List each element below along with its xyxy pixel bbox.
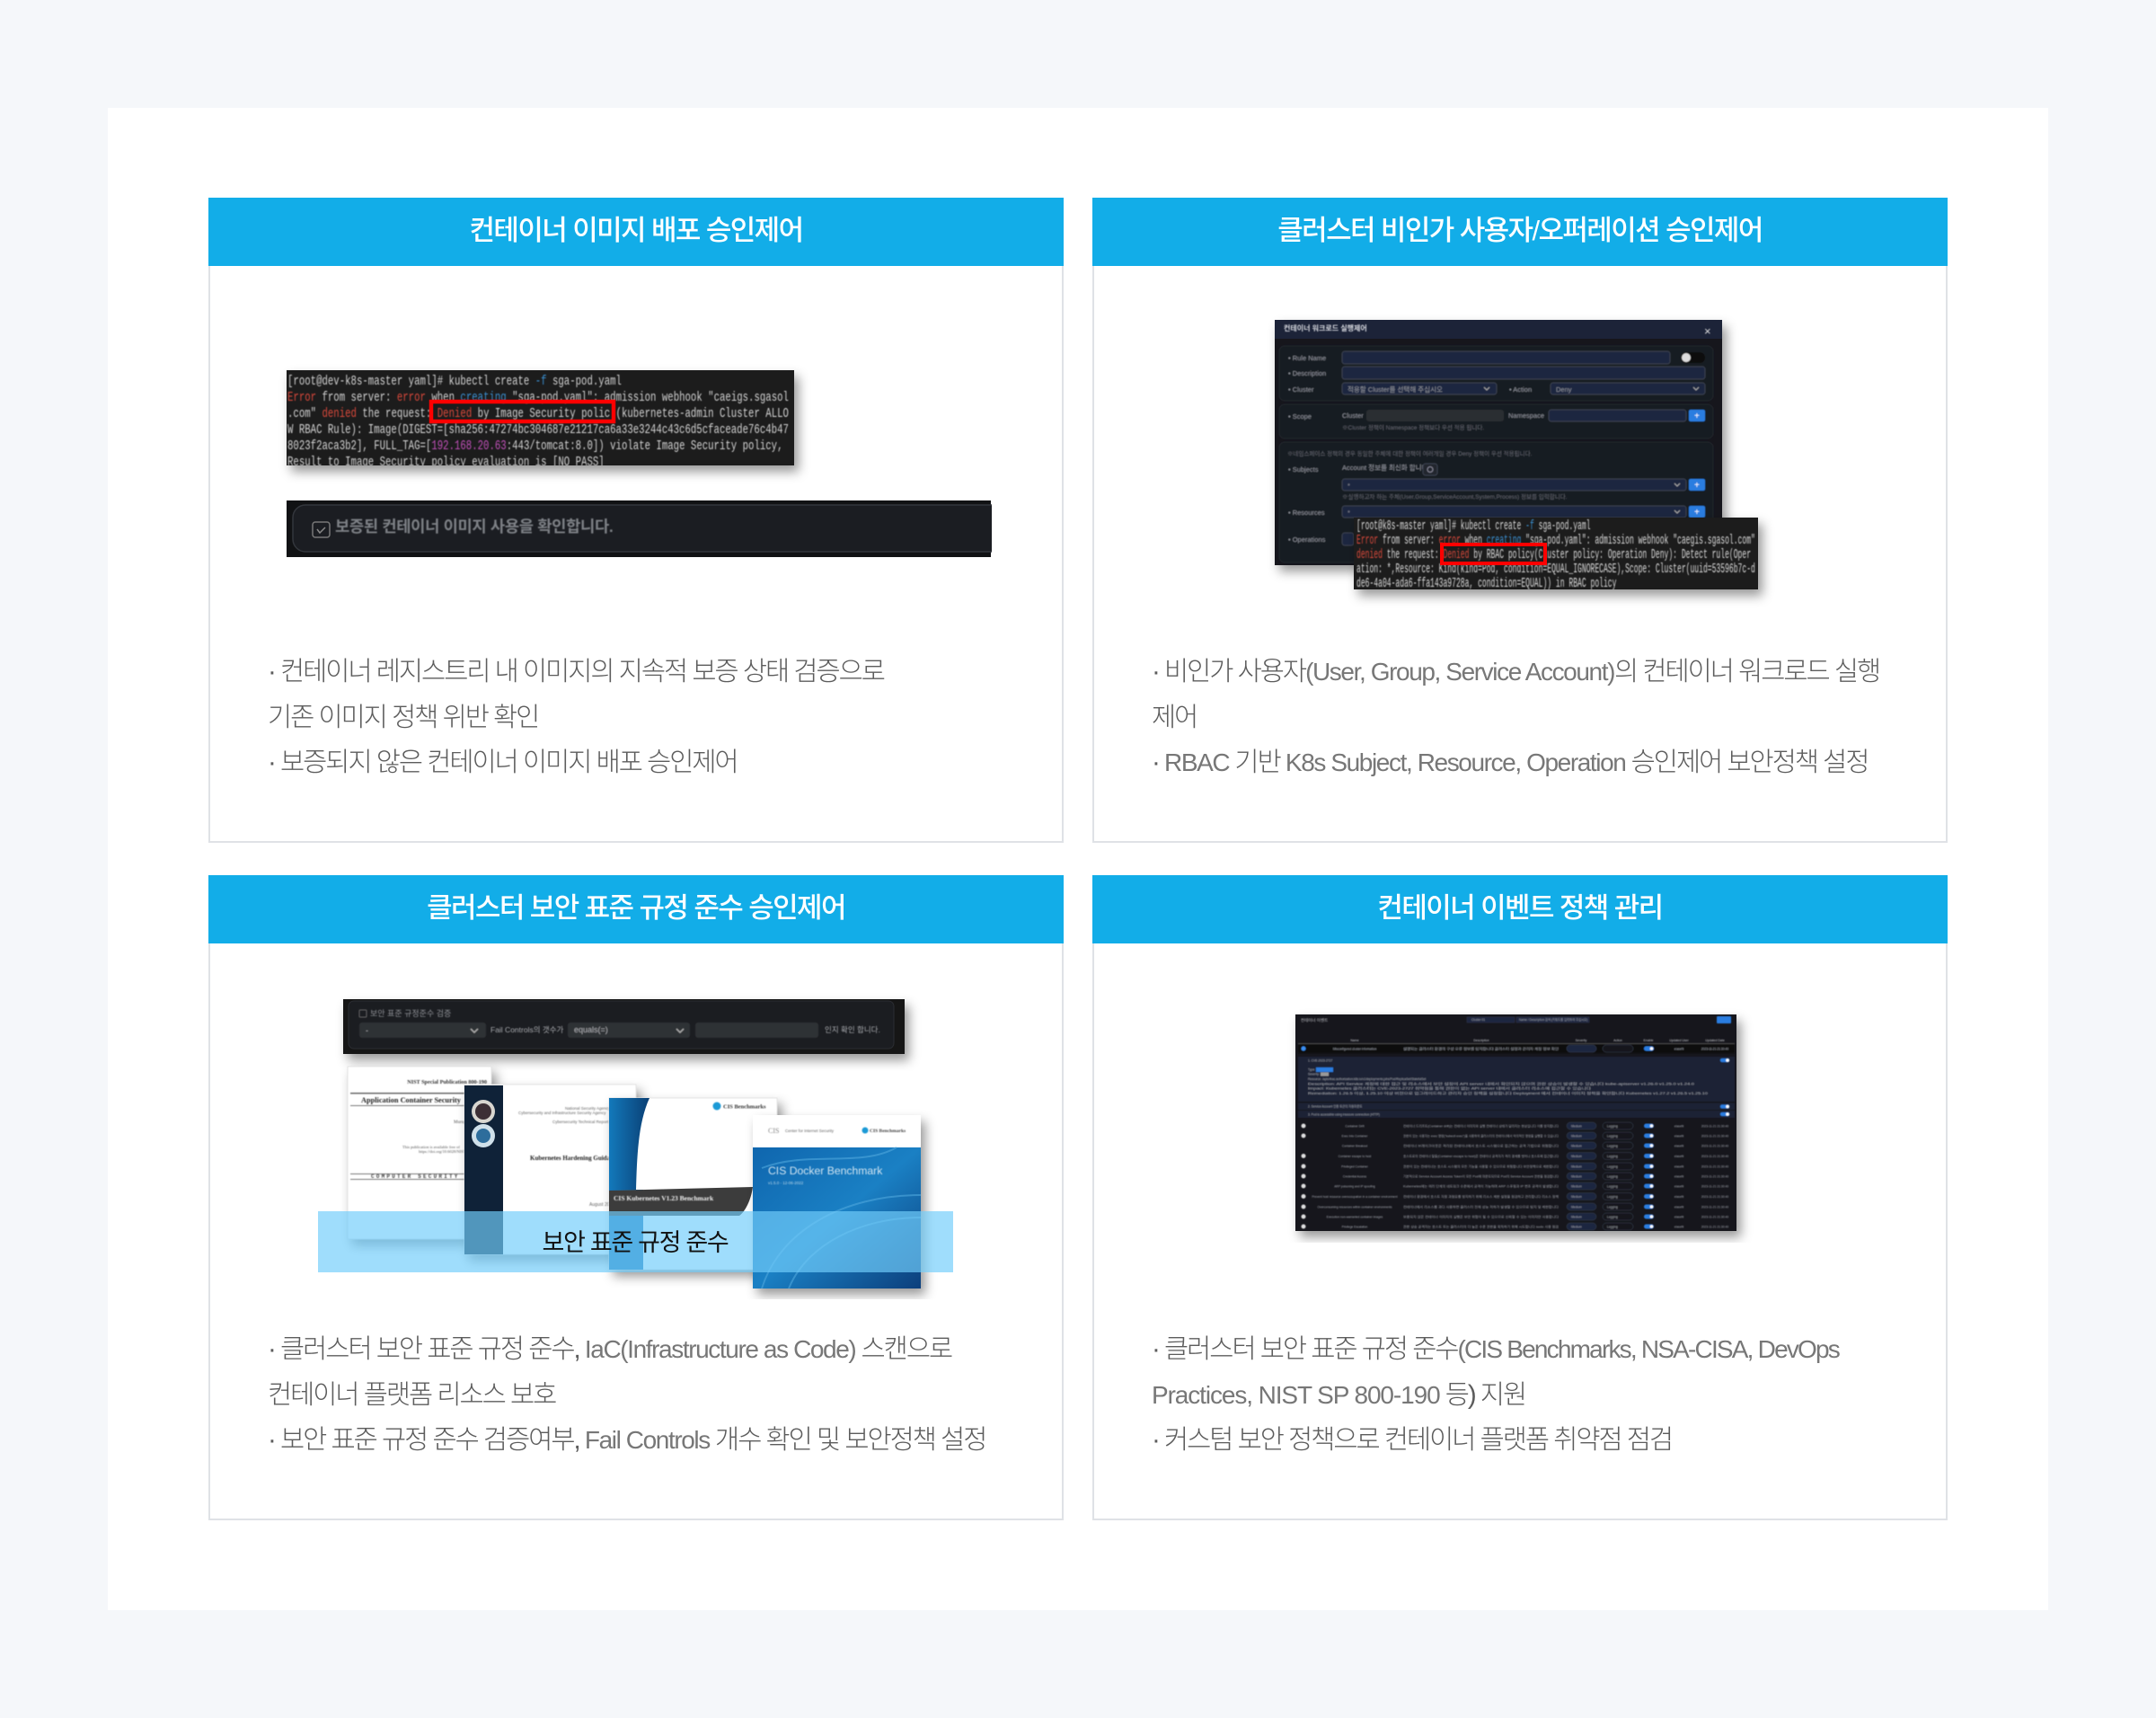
compliance check bar: 보안 표준 규정준수 검증	[370, 1008, 451, 1018]
workload control modal: ※Cluster 정책이 Namespace 정책보다 우선 적용 됩니다.	[1342, 423, 1484, 431]
event policy rows: 기본적으로 Service Account Access Token이 모든 Pod에 마운트되므로 Pod의 Service Account 권한을 점검합니다	[1403, 1173, 1559, 1179]
workload control modal: *	[1348, 482, 1350, 490]
event policy rows: Medium	[1571, 1184, 1582, 1188]
workload control modal: ※네임스페이스 정책의 경우 동일한 주체에 대한 정책이 여러개일 경우 Deny 정책이 우선 적용됩니다.	[1287, 449, 1533, 457]
event policy rows: 권한이 있는 사용자는 exec 명령("kubectl exec")을 사용하여 클러스터의 컨테이너에서 악의적인 명령을 실행할 수 있습니다	[1403, 1134, 1559, 1138]
event policy rows: Logging	[1607, 1175, 1618, 1179]
description text: · 커스텀 보안 정책으로 컨테이너 플랫폼 취약점 점검	[1152, 1425, 1672, 1455]
white card background	[108, 108, 2048, 1610]
heading: unauthorized user and operation	[1092, 198, 1948, 266]
image: container event policy table screenshot: Description	[1473, 1039, 1489, 1042]
workload control modal: 적용할 Cluster를 선택해 주십시오	[1348, 385, 1443, 394]
description text	[268, 657, 884, 777]
document: Kubernetes Hardening Guidance: Kubernetes Hardening Guidance	[530, 1155, 619, 1162]
event policy rows: elasefit	[1674, 1175, 1683, 1179]
description text	[1152, 657, 1879, 777]
terminal screenshot: W RBAC Rule): Image(DIGEST=[sha256:47274bc304687e21217ca6a33e3244c43c6d5cfaceade76c4b47	[287, 421, 789, 438]
document: CIS Kubernetes Benchmark	[609, 1098, 777, 1270]
event policy rows: Logging	[1607, 1165, 1618, 1168]
event policy rows: 2023-11-21 21:30:40	[1701, 1226, 1728, 1229]
workload control modal: 컨테이너 워크로드 실행제어	[1284, 323, 1367, 332]
compliance check bar: 인지 확인 합니다.	[825, 1025, 880, 1034]
event policy rows: 2023-11-21 21:30:40	[1701, 1145, 1728, 1148]
caption band: security standard compliance	[318, 1211, 953, 1272]
event policy rows: elasefit	[1674, 1184, 1683, 1188]
event policy rows: Privileged Container	[1341, 1165, 1369, 1168]
image: compliance bar and benchmark documents	[318, 998, 953, 1299]
description text: · 비인가 사용자(User, Group, Service Account)의 컨테이너 워크로드 실행	[1152, 657, 1879, 686]
description text: · RBAC 기반 K8s Subject, Resource, Operation 승인제어 보안정책 설정	[1152, 748, 1868, 777]
terminal screenshot: Error from server: error when creating "sga-pod.yaml": admission webhook "caeigs.sgasol	[287, 389, 789, 405]
document: CIS Docker Benchmark: CIS	[768, 1127, 779, 1135]
event policy rows: Logging	[1607, 1215, 1618, 1218]
terminal screenshot: Result to Image Security policy evaluation is [NO PASS]	[287, 454, 605, 470]
image: container event policy table screenshot: Misconfigured cluster information	[1333, 1048, 1376, 1051]
document: Kubernetes Hardening Guidance: Cybersecurity and Infrastructure Security Agency	[518, 1111, 606, 1115]
document: CIS Kubernetes Benchmark: CIS Benchmarks	[723, 1103, 766, 1111]
caption band: security standard compliance: 보안 표준 규정 준수	[543, 1229, 729, 1256]
event policy rows: Privilege Escalation	[1342, 1226, 1368, 1229]
event policy rows: Logging	[1607, 1206, 1618, 1209]
image: container event policy table screenshot: Severity:	[1308, 1073, 1320, 1076]
heading: security standard compliance	[208, 875, 1064, 943]
workload control modal: ×	[1704, 324, 1711, 338]
description text: · 보안 표준 규정 준수 검증여부, Fail Controls 개수 확인 및 보안정책 설정	[268, 1425, 985, 1455]
image: container event policy table screenshot: Name / Description 검색 (키워드를 입력하여 주십시오)	[1519, 1017, 1587, 1022]
image: container event policy table screenshot: 1. CVE-2023-2727	[1308, 1058, 1332, 1062]
document: CIS Docker Benchmark: CIS Docker Benchmark	[768, 1165, 883, 1177]
document: CIS Docker Benchmark: CIS Benchmarks	[870, 1129, 906, 1134]
event policy rows: Medium	[1571, 1145, 1582, 1148]
document: NIST SP 800-190	[348, 1067, 491, 1239]
panel: unauthorized user and operation admission control	[1092, 198, 1948, 843]
terminal overlay	[1354, 518, 1758, 591]
event policy rows: Medium	[1571, 1175, 1582, 1179]
panel: cluster security standard compliance admission control	[208, 875, 1064, 1520]
workload control modal: • Rule Name	[1288, 354, 1326, 362]
compliance check bar: Fail Controls의 갯수가	[490, 1025, 564, 1034]
event policy rows: 2023-11-21 21:30:40	[1701, 1215, 1728, 1218]
terminal overlay: Error from server: error when creating "sga-pod.yaml": admission webhook "caegis.sgasol.com"	[1356, 533, 1755, 548]
image: container event policy table screenshot: elasefit	[1674, 1048, 1683, 1051]
workload control modal: • Cluster	[1288, 385, 1314, 394]
description text: · 보증되지 않은 컨테이너 이미지 배포 승인제어	[268, 748, 738, 777]
event policy rows: 컨테이너 드리프트(Container drift)는 컨테이너 이미지와 실행 컨테이너 상태가 달라지는 현상입니다 이를 방지합니다	[1403, 1123, 1559, 1129]
event policy rows: elasefit	[1674, 1215, 1683, 1218]
document: NIST SP 800-190: Application Container Security	[361, 1096, 462, 1104]
compliance check bar: -	[366, 1026, 368, 1035]
event policy rows: elasefit	[1674, 1134, 1683, 1138]
panel: container event policy management	[1092, 875, 1948, 1520]
image: container event policy table screenshot: Description: API Service 계정에 대한 접근 및 리소스에서 보안 설정이 API server 내에서 확인되지 않으며 권한 상승이 발생할 수 있습니다 kube-apiserver v1.26.0 v1.25.0 v1.24.0	[1308, 1082, 1694, 1085]
workload control modal: Deny	[1556, 385, 1572, 394]
event policy rows: elasefit	[1674, 1165, 1683, 1168]
event policy rows: 보증되지 않은 컨테이너 이미지의 실행은 보안 위협이 될 수 있으므로 신뢰할 수 있는 이미지만 사용합니다	[1403, 1215, 1559, 1218]
event policy rows: 2023-11-21 21:30:40	[1701, 1175, 1728, 1179]
image: container event policy table screenshot: 2. Service Account 인증 토큰의 자동마운트	[1308, 1103, 1362, 1109]
terminal overlay: ation: *,Resource: Kind(kind=Pod, condition=EQUAL_IGNORECASE),Scope: Cluster(uuid=53596b7c-d	[1356, 562, 1755, 577]
event policy rows: Medium	[1571, 1206, 1582, 1209]
image: container event policy table screenshot: Name	[1350, 1039, 1359, 1042]
event policy rows: Kubernetes에는 여러 단계의 네트워크 수준에서 공격이 가능하며 ARP 스푸핑과 IP 변조 공격이 발생합니다	[1403, 1184, 1559, 1188]
event policy rows: 2023-11-21 21:30:40	[1701, 1195, 1728, 1199]
event policy rows: 컨테이너 환경에서 호스트 자원 과점유를 방지하기 위해 리소스 제한 설정을 점검하고 관리합니다 리소스 정책	[1403, 1194, 1559, 1199]
event policy rows: Container Drift	[1345, 1125, 1365, 1129]
event policy rows: Logging	[1607, 1145, 1618, 1148]
document: Kubernetes Hardening Guidance: Cybersecurity Technical Report	[552, 1120, 609, 1124]
event policy rows: elasefit	[1674, 1206, 1683, 1209]
workload control modal: Cluster	[1342, 412, 1364, 420]
event policy rows: Logging	[1607, 1134, 1618, 1138]
document: CIS Docker Benchmark: Center for Internet Security	[785, 1129, 835, 1133]
event policy rows: 컨테이너에서 리소스를 과다 사용하면 클러스터 전체 성능 저하가 발생할 수 있으므로 탐지 및 제한합니다	[1403, 1204, 1559, 1209]
description text	[268, 1334, 985, 1455]
verified image notice bar: 보증된 컨테이너 이미지 사용을 확인합니다.	[335, 518, 613, 536]
document: CIS Docker Benchmark	[753, 1115, 921, 1288]
description text: Practices, NIST SP 800-190 등) 지원	[1152, 1380, 1525, 1409]
event policy rows: Logging	[1607, 1195, 1618, 1199]
event policy rows: elasefit	[1674, 1226, 1683, 1229]
event policy rows: elasefit	[1674, 1155, 1683, 1158]
document: Kubernetes Hardening Guidance: August 2022	[589, 1202, 614, 1208]
workload control modal: • Resources	[1288, 509, 1325, 517]
image: container event policy table screenshot: Impact: Kubernetes 클러스터는 CVE-2023-2727 취약점을 통해 권한이 없는 API server 내에서 클러스터 리소스에 접근할 수 있습니다	[1308, 1085, 1591, 1091]
terminal screenshot: 8023f2aca3b2], FULL_TAG=[192.168.20.63:443/tomcat:8.0]) violate Image Security policy,	[287, 438, 783, 454]
event policy rows: ARP poisoning and IP spoofing	[1334, 1184, 1375, 1188]
document: CIS Docker Benchmark: v1.5.0 - 12-06-2022	[768, 1181, 804, 1185]
image: container event policy table screenshot	[1293, 1014, 1748, 1243]
workload control modal: +	[1694, 481, 1700, 491]
document: CIS Kubernetes Benchmark: CIS Kubernetes V1.23 Benchmark	[614, 1194, 714, 1202]
description text: 제어	[1152, 703, 1197, 731]
event policy rows: 2023-11-21 21:30:40	[1701, 1206, 1728, 1209]
document: NIST SP 800-190: COMPUTER SECURITY	[371, 1173, 460, 1180]
image: container event policy table screenshot: Severity	[1576, 1039, 1587, 1042]
document: NIST SP 800-190: This publication is available free of	[402, 1145, 460, 1149]
workload control modal: Namespace	[1508, 412, 1544, 420]
document: Kubernetes Hardening Guidance	[464, 1085, 636, 1254]
description text: 컨테이너 플랫폼 리소스 보호	[268, 1380, 555, 1409]
description text: · 컨테이너 레지스트리 내 이미지의 지속적 보증 상태 검증으로	[268, 657, 884, 686]
event policy rows: Logging	[1607, 1155, 1618, 1158]
description text: 기존 이미지 정책 위반 확인	[268, 703, 538, 731]
event policy rows: 2023-11-21 21:30:40	[1701, 1184, 1728, 1188]
terminal overlay: de6-4a04-ada6-ffa143a9728a, condition=EQUAL)) in RBAC policy	[1356, 576, 1616, 591]
event policy rows: Medium	[1571, 1215, 1582, 1218]
event policy rows: 2023-11-21 21:30:40	[1701, 1125, 1728, 1129]
image: container event policy table screenshot: 3. Pod is accessible using insecure connection (HTTP)	[1308, 1112, 1380, 1116]
image: container event policy table screenshot: 설명되는 클러스터 환경의 구성 오류 정보를 탐지합니다 클러스터 설정과 관리자 계정 정보 확인	[1403, 1046, 1559, 1051]
red highlight box	[1442, 545, 1545, 563]
terminal screenshot: .com" denied the request: Denied by Image Security polic (kubernetes-admin Cluster ALLO	[287, 405, 789, 421]
event policy rows: Medium	[1571, 1226, 1582, 1229]
event policy rows: Overconsuming resources within container environments	[1317, 1206, 1392, 1209]
heading: container event policy: 컨테이너 이벤트 정책 관리	[1377, 892, 1663, 924]
workload control modal	[1275, 320, 1722, 565]
event policy rows: 2023-11-21 21:30:40	[1701, 1155, 1728, 1158]
event policy rows: Medium	[1571, 1165, 1582, 1168]
event policy rows: Medium	[1571, 1125, 1582, 1129]
workload control modal: Account 정보를 최신화 합니다	[1342, 463, 1428, 472]
document: NIST SP 800-190: Murugiah	[454, 1120, 472, 1125]
event policy rows: Execution non-warranted container images	[1327, 1215, 1383, 1218]
image: container event policy table screenshot: Updated Date	[1705, 1039, 1725, 1042]
event policy rows: Medium	[1571, 1195, 1582, 1199]
workload control modal: • Operations	[1288, 536, 1326, 544]
document: NIST SP 800-190: https://doi.org/10.6028/NIST	[419, 1149, 466, 1154]
compliance check bar: equals(=)	[574, 1025, 608, 1034]
image: container event policy table screenshot: Enable	[1644, 1039, 1653, 1042]
workload control modal: ※실행하고자 하는 주체(User,Group,ServiceAccount,System,Process) 정보를 입력합니다.	[1342, 492, 1568, 500]
event policy rows: Logging	[1607, 1184, 1618, 1188]
event policy rows: Exec Into Container	[1342, 1134, 1368, 1138]
image: container event policy table screenshot: 컨테이너 이벤트	[1301, 1017, 1328, 1023]
red highlight box	[431, 402, 614, 421]
workload control modal: +	[1694, 412, 1700, 421]
image: container event policy table screenshot: Action	[1613, 1039, 1622, 1042]
image: terminal and verified image bar	[284, 369, 992, 557]
document: NIST SP 800-190: NIST Special Publication 800-190	[407, 1079, 487, 1085]
workload control modal: +	[1694, 508, 1700, 518]
verified image notice bar	[287, 500, 1012, 557]
image: container event policy table screenshot: Updated User	[1669, 1039, 1690, 1042]
event policy rows: Container escape to host	[1339, 1155, 1371, 1158]
image: container event policy table screenshot: Remediation: 1.26.5 이상, 1.25.10 이상 버전으로 업그레이드하고 관리자 승인 정책을 설정합니다 Deployment 에서 컨테이너 이미지 정책을 확인합니다 Kubernetes v1.27.2 v1.26.5 v1.25.10	[1308, 1091, 1708, 1095]
event policy rows: Container Breakout	[1342, 1145, 1367, 1148]
terminal screenshot: [root@dev-k8s-master yaml]# kubectl create -f sga-pod.yaml	[287, 373, 622, 389]
event policy rows: Medium	[1571, 1155, 1582, 1158]
description text: · 클러스터 보안 표준 규정 준수(CIS Benchmarks, NSA-CISA, DevOps	[1152, 1334, 1839, 1364]
document: Kubernetes Hardening Guidance: National Security Agency	[565, 1106, 611, 1111]
description text: · 클러스터 보안 표준 규정 준수, IaC(Infrastructure as Code) 스캔으로	[268, 1334, 951, 1364]
event policy rows: Medium	[1571, 1134, 1582, 1138]
heading: container image deployment	[208, 198, 1064, 266]
terminal screenshot	[287, 370, 794, 470]
event policy rows: 2023-11-21 21:30:40	[1701, 1165, 1728, 1168]
workload control modal: *	[1348, 509, 1350, 517]
event policy rows: elasefit	[1674, 1145, 1683, 1148]
heading: security standard compliance: 클러스터 보안 표준 규정 준수 승인제어	[427, 892, 845, 924]
event policy rows: 호스트로의 컨테이너 탈출(Container escape to host)은 컨테이너 공격자가 격리 경계를 벗어나 호스트에 접근합니다	[1403, 1154, 1559, 1158]
image: container event policy table screenshot: Type:	[1308, 1067, 1315, 1071]
event policy rows	[1301, 1122, 1728, 1230]
event policy rows: 권한이 있는 컨테이너는 호스트 시스템의 모든 기능을 사용할 수 있으므로 위험합니다 보안정책으로 제한합니다	[1403, 1165, 1559, 1168]
event policy rows: elasefit	[1674, 1195, 1683, 1199]
image: workload control modal and terminal	[1272, 319, 1770, 603]
event policy rows: Logging	[1607, 1226, 1618, 1229]
terminal overlay: [root@k8s-master yaml]# kubectl create -f sga-pod.yaml	[1356, 518, 1591, 534]
event policy rows: Prevent host resource overoccupation in a container environment	[1312, 1195, 1398, 1199]
heading: container image deployment: 컨테이너 이미지 배포 승인제어	[469, 215, 803, 246]
compliance check bar	[343, 999, 905, 1054]
event policy rows: Logging	[1607, 1125, 1618, 1129]
event policy rows: 권한 상승 공격자는 호스트 또는 클러스터의 더 높은 수준 권한을 획득하기 위해 시도합니다 sudo 사용 점검	[1403, 1224, 1559, 1229]
heading: container event policy	[1092, 875, 1948, 943]
event policy rows: 컨테이너 브레이크아웃은 격리된 컨테이너에서 호스트 시스템으로 접근하는 공격 기법으로 위험합니다	[1403, 1143, 1559, 1148]
workload control modal: • Action	[1509, 385, 1532, 394]
description text	[1152, 1334, 1840, 1455]
workload control modal: • Description	[1288, 369, 1326, 377]
panel: container image deployment admission control	[208, 198, 1064, 843]
terminal overlay: denied the request: Denied by RBAC policy(Cluster policy: Operation Deny): Detect rule(Oper	[1356, 547, 1751, 562]
image: container event policy table screenshot: 2023-11-21 21:30:40	[1701, 1048, 1728, 1051]
image: container event policy table screenshot: Cluster 01	[1471, 1018, 1485, 1022]
heading: unauthorized user and operation: 클러스터 비인가 사용자/오퍼레이션 승인제어	[1277, 215, 1763, 246]
event policy rows: 2023-11-21 21:30:40	[1701, 1134, 1728, 1138]
event policy rows: Credential Access	[1343, 1175, 1367, 1179]
workload control modal: • Scope	[1288, 412, 1312, 421]
event policy rows: elasefit	[1674, 1125, 1683, 1129]
workload control modal: • Subjects	[1288, 465, 1319, 474]
image: container event policy table screenshot: Resource: /apis/rbac.authorization.k8s.io/v1/deployments,jobs/Pod/ReplicaSet/StatefulSet	[1308, 1077, 1426, 1081]
